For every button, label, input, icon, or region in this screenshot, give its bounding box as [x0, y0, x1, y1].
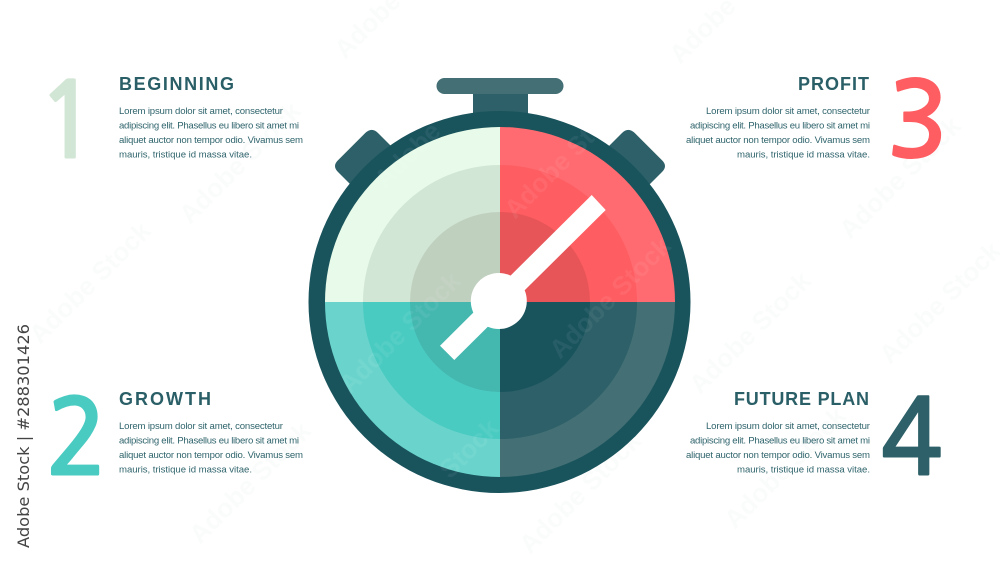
- text block: beginning: adipiscing elit. Phasellus eu libero sit amet mi: [119, 120, 299, 132]
- watermark over dial: Adobe Stock: [333, 265, 467, 399]
- watermark over dial: Adobe Stock: [543, 230, 677, 364]
- text block: beginning: aliquet auctor non tempor odio. Vivamus sem: [119, 135, 303, 146]
- quadrant: profit: [500, 127, 675, 302]
- icon: right side button: [600, 130, 665, 190]
- quadrant: future plan: [500, 302, 675, 477]
- number 4: 4: [880, 387, 944, 491]
- watermark pattern: Adobe Stock: [513, 425, 647, 559]
- text block: future plan: aliquet auctor non tempor odio. Vivamus sem: [686, 450, 870, 461]
- text block: profit: mauris, tristique id massa vitae.: [737, 150, 870, 160]
- watermark over dial: Adobe: [368, 116, 446, 194]
- text block: growth: [119, 421, 303, 476]
- heading: future plan: FUTURE PLAN: [734, 389, 869, 409]
- watermark pattern: Adobe Stock: [23, 215, 157, 349]
- text block: growth: adipiscing elit. Phasellus eu libero sit amet mi: [119, 436, 299, 446]
- icon: crown bar: [436, 78, 564, 94]
- stopwatch case: [308, 111, 690, 493]
- text block: future plan: Lorem ipsum dolor sit amet, consectetur: [706, 421, 871, 432]
- watermark pattern: Adobe Stock: [718, 400, 852, 534]
- watermark over dial: Stock: [433, 413, 505, 484]
- text block: beginning: mauris, tristique id massa vitae.: [119, 150, 252, 160]
- text block: growth: Lorem ipsum dolor sit amet, consectetur: [119, 421, 284, 432]
- text block: profit: Lorem ipsum dolor sit amet, consectetur: [706, 106, 871, 117]
- quadrant: growth: [325, 302, 500, 477]
- panel: 3 profit: [686, 70, 950, 174]
- icon: hub: [471, 273, 527, 329]
- text block: future plan: mauris, tristique id massa vitae.: [737, 464, 870, 476]
- text block: beginning: [119, 106, 303, 160]
- watermark pattern: Adobe Stock: [173, 95, 307, 229]
- text block: future plan: adipiscing elit. Phasellus eu libero sit amet mi: [690, 436, 870, 446]
- watermark pattern: Adobe Stock: [833, 110, 967, 244]
- side credit text: Adobe Stock | #288301426: [14, 324, 33, 548]
- text block: profit: [686, 106, 871, 160]
- number 3: 3: [886, 70, 950, 174]
- icon: clock hand: [440, 195, 606, 360]
- heading: beginning: BEGINNING: [119, 74, 234, 94]
- watermark pattern: Adobe Stock: [683, 265, 817, 399]
- text block: profit: aliquet auctor non tempor odio. Vivamus sem: [686, 135, 870, 146]
- text block: growth: aliquet auctor non tempor odio. Vivamus sem: [119, 450, 303, 461]
- panel: 4 future plan: [686, 387, 944, 491]
- icon: left side button: [335, 130, 400, 190]
- panel: 1 beginning: [36, 70, 303, 174]
- icon: crown stem: [473, 90, 528, 120]
- text block: beginning: Lorem ipsum dolor sit amet, consectetur: [119, 106, 284, 117]
- number 1: 1: [36, 70, 100, 174]
- stopwatch: [308, 78, 690, 493]
- heading: growth: GROWTH: [119, 389, 211, 409]
- quadrant: beginning: [325, 127, 500, 302]
- text block: profit: adipiscing elit. Phasellus eu libero sit amet mi: [690, 120, 870, 132]
- watermark over dial: [333, 90, 677, 484]
- text block: growth: mauris, tristique id massa vitae.: [119, 464, 252, 476]
- watermark over dial: Adobe Stock: [498, 90, 632, 224]
- panel: 2 growth: [45, 387, 303, 491]
- watermark pattern: Adobe Stock: [183, 415, 317, 549]
- number 2: 2: [45, 387, 109, 491]
- heading: profit: PROFIT: [798, 74, 869, 94]
- text block: future plan: [686, 421, 871, 476]
